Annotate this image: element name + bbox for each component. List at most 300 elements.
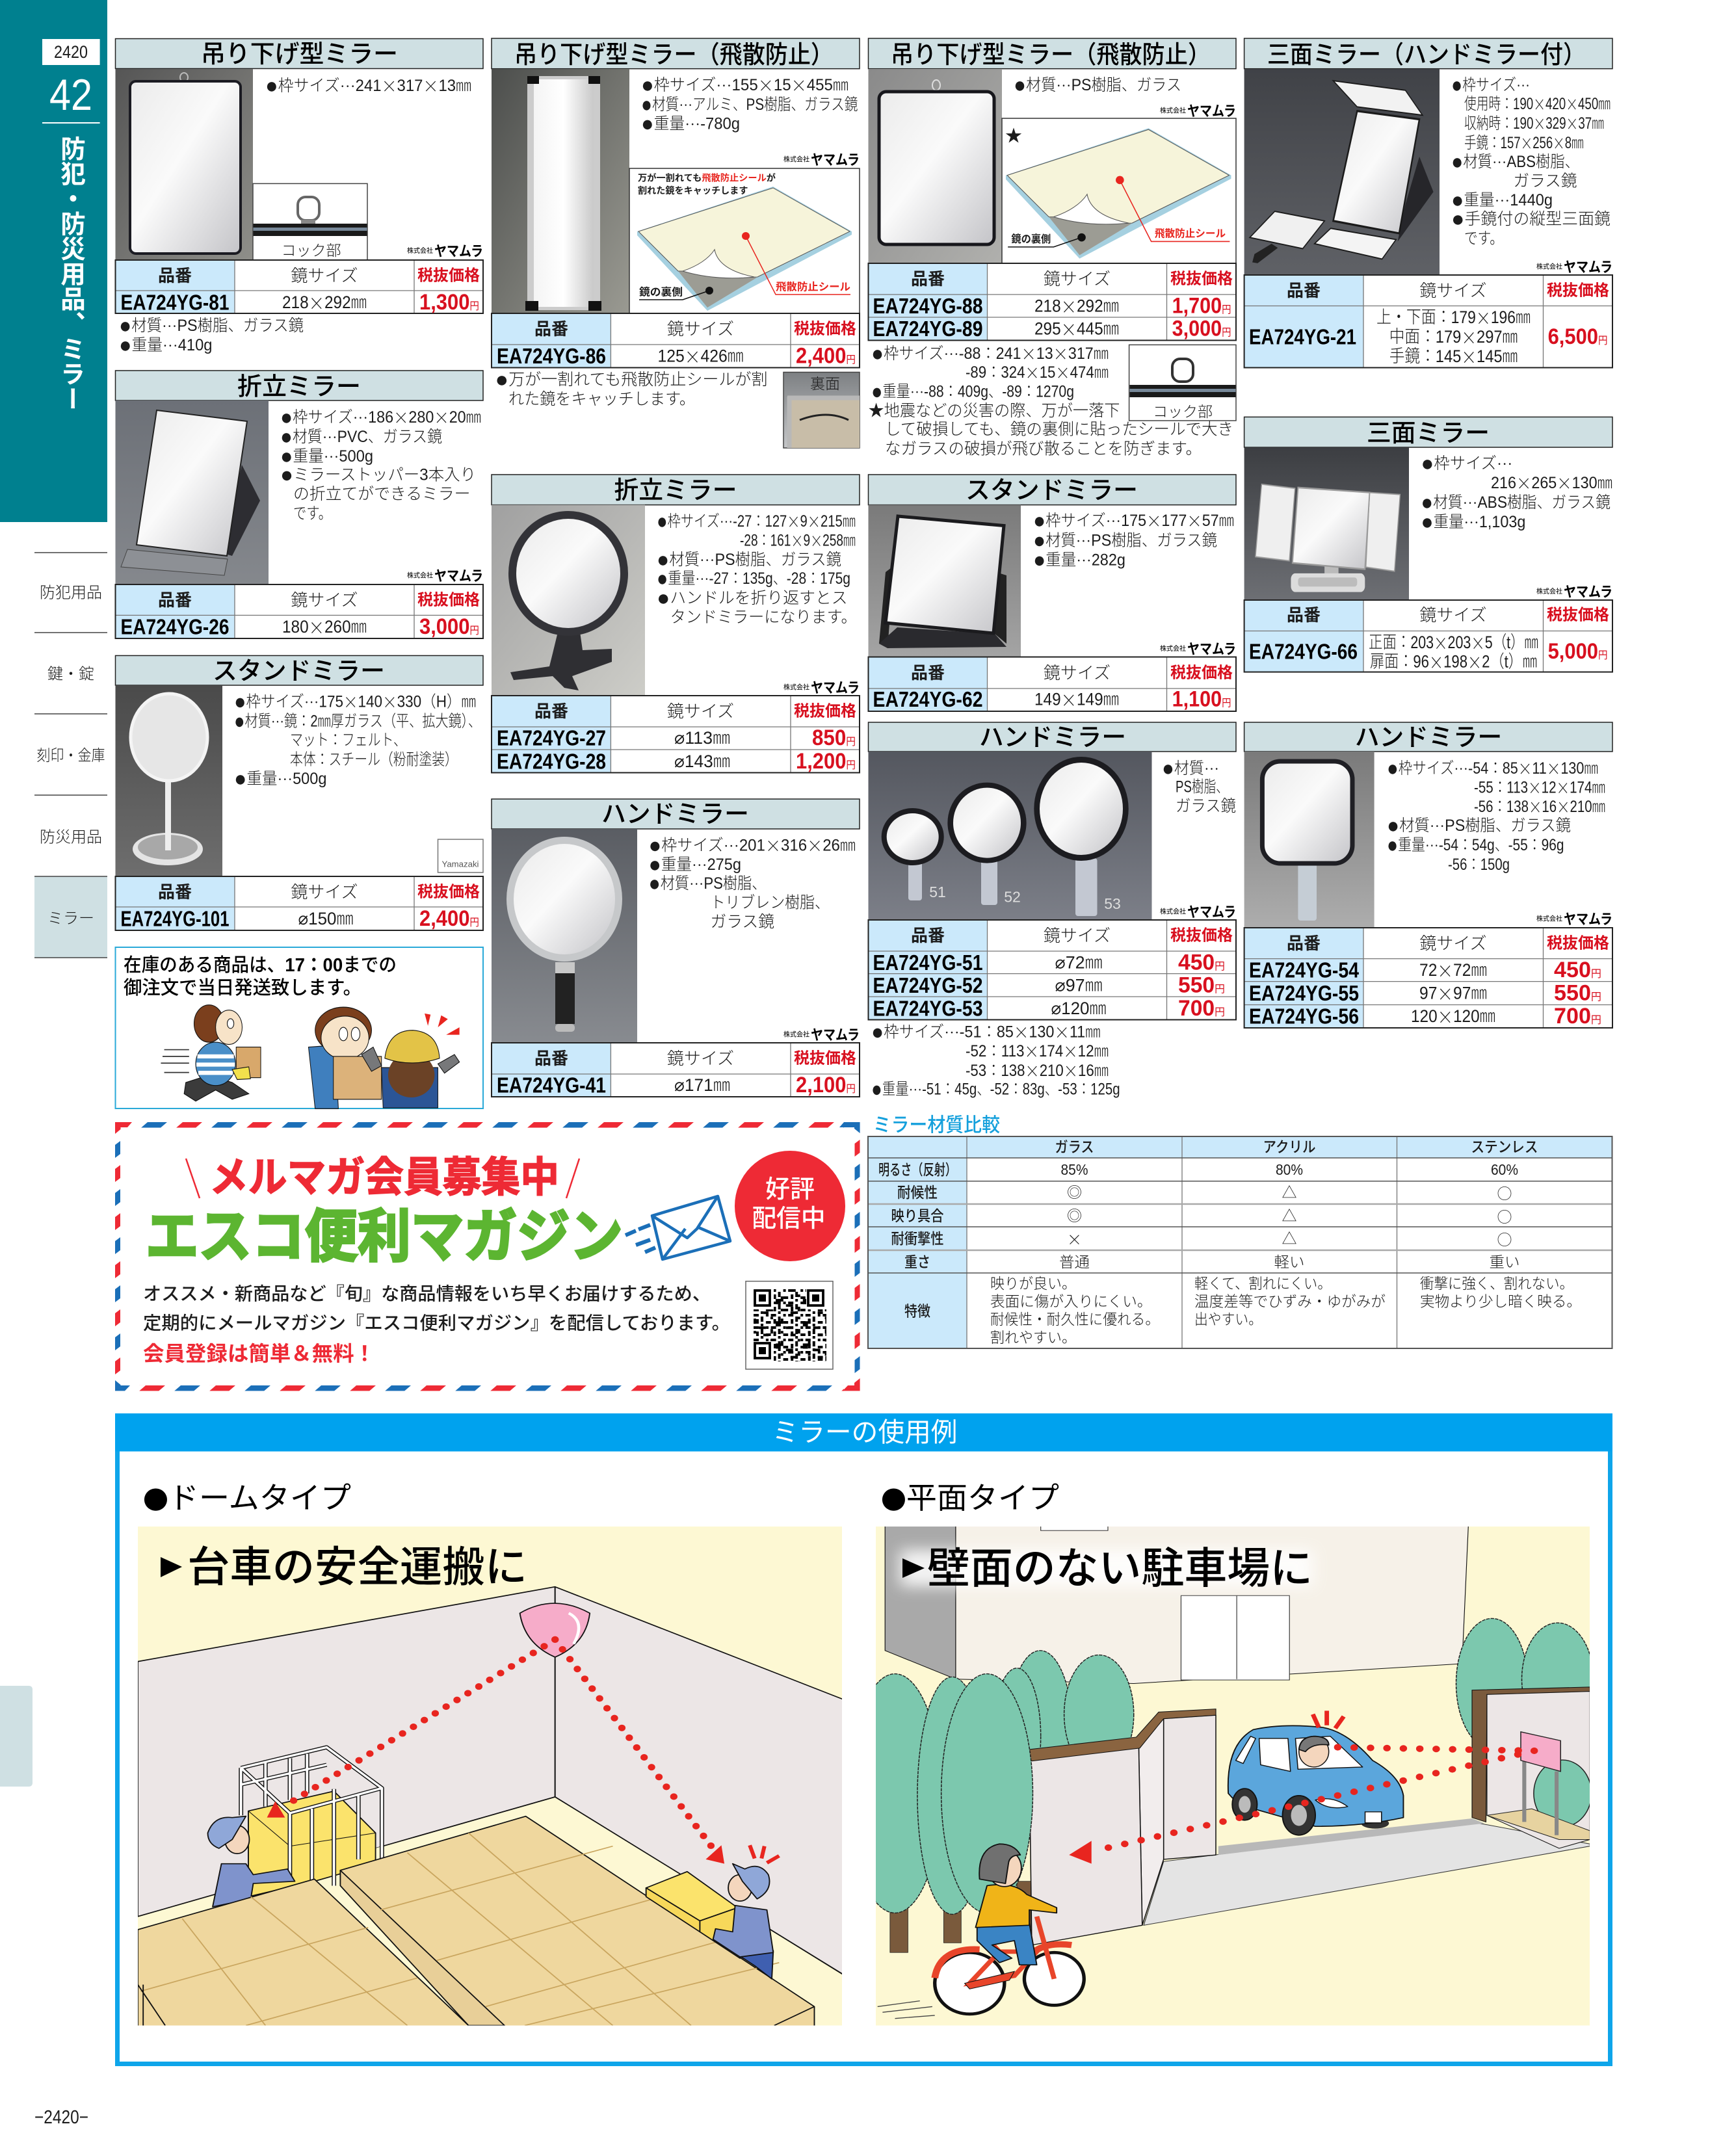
spec text — [1162, 756, 1236, 815]
notes: -89：324×15×474㎜ — [966, 361, 1109, 384]
spec table: 295×445㎜ — [1034, 316, 1119, 341]
spec table: 円 — [1215, 984, 1225, 995]
spec text: ●材質… — [1162, 756, 1219, 781]
spec table: 税抜価格 — [1170, 927, 1233, 944]
notes: ●材質…PS樹脂、ガラス鏡 — [119, 313, 304, 338]
spec table: 税抜価格 — [1547, 282, 1609, 299]
spec text: ●材質…鏡：2㎜厚ガラス（平、拡大鏡）、 — [234, 709, 481, 733]
heading: 三面ミラー（ハンドミラー付） — [1267, 42, 1586, 69]
spec table: 鏡サイズ — [667, 701, 734, 721]
child on bicycle — [935, 1952, 1005, 2014]
panel: 三面ミラー(ハンドミラー付) EA724YG-21 — [1244, 38, 1612, 369]
heading: 三面ミラー — [1367, 420, 1490, 447]
maker logo: Yamazaki — [442, 859, 479, 869]
table: material comparison: 重さ — [904, 1253, 930, 1270]
product photo — [116, 69, 253, 260]
left worker — [213, 1864, 295, 1907]
body text: 定期的にメールマガジン『エスコ便利マガジン』を配信しております。 — [143, 1313, 730, 1333]
table: material comparison: 軽い — [1274, 1253, 1304, 1270]
heading: ハンドミラー — [1355, 724, 1502, 752]
maker logo: ヤマムラ — [1187, 904, 1236, 921]
maker logo — [407, 243, 483, 259]
spec text: ●重量…-54：54g、-55：96g — [1387, 833, 1564, 858]
spec text: トリブレン樹脂、 — [710, 893, 830, 911]
maker logo — [1160, 641, 1236, 657]
inset: cock detail: コック部 — [281, 242, 341, 259]
spec table: ⌀113㎜ — [674, 728, 730, 748]
table: material comparison: ガラス — [1055, 1138, 1094, 1155]
spec text — [280, 405, 481, 523]
spec table: EA724YG-86 — [497, 344, 606, 368]
car — [1361, 1821, 1389, 1829]
product photo — [869, 505, 1021, 657]
illustration: worker with box and helmet — [308, 1007, 460, 1108]
product photo — [492, 69, 629, 313]
spec table: 税抜価格 — [794, 320, 856, 338]
spec table: 税抜価格 — [1170, 664, 1233, 681]
maker logo — [783, 1027, 860, 1043]
table: material comparison: △ — [1282, 1184, 1296, 1201]
left walls — [1164, 1715, 1216, 1859]
spec table: 550 — [1178, 973, 1215, 998]
spec text: ガラス鏡 — [1514, 172, 1577, 190]
spec text: ●枠サイズ…-54：85×11×130㎜ — [1387, 756, 1598, 781]
notes: ●重量…-51：45g、-52：83g、-53：125g — [871, 1077, 1120, 1102]
spec table — [1244, 600, 1612, 674]
maker logo: 株式会社 — [407, 246, 433, 255]
trees front — [890, 1904, 908, 1952]
spec table: ⌀120㎜ — [1051, 999, 1107, 1018]
maker logo: ヤマムラ — [1564, 259, 1612, 276]
illustration: running courier — [161, 1005, 261, 1101]
spec table: EA724YG-101 — [121, 906, 229, 931]
table: material comparison: ◎ — [1067, 1207, 1082, 1224]
right gate — [1472, 1687, 1590, 1822]
spec text: ●材質…ABS樹脂、 — [1451, 150, 1579, 174]
table: material comparison: 軽くて、割れにくい。 — [1194, 1275, 1332, 1292]
notes — [119, 313, 304, 358]
spec table: 品番 — [911, 663, 945, 683]
product photo — [492, 505, 645, 696]
spec text — [1033, 508, 1234, 572]
table: material comparison: 衝撃に強く、割れない。 — [1420, 1275, 1573, 1292]
table: material comparison: ○ — [1497, 1227, 1512, 1250]
spec table: 税抜価格 — [1547, 935, 1609, 952]
spec text: ●枠サイズ…186×280×20㎜ — [280, 405, 481, 430]
maker logo: 株式会社 — [1160, 644, 1186, 653]
table: material comparison: 映り具合 — [891, 1207, 944, 1224]
callout text: 御注文で当日発送致します。 — [124, 977, 362, 999]
magazine name: エスコ便利マガジン — [146, 1204, 623, 1269]
spec table: EA724YG-62 — [873, 687, 983, 711]
spec text: マット：フェルト、 — [290, 731, 406, 750]
heading: スタンドミラー — [213, 658, 385, 685]
spec table: 3,000 — [419, 614, 475, 639]
spec table: 円 — [846, 354, 856, 365]
table: material comparison: 耐衝撃性 — [891, 1230, 944, 1247]
spec table: 税抜価格 — [1170, 270, 1233, 287]
maker logo: ヤマムラ — [811, 152, 860, 168]
illustration caption: 台車の安全運搬に — [187, 1543, 527, 1590]
table: material comparison: ◎ — [1067, 1184, 1082, 1201]
maker logo: 株式会社 — [1536, 263, 1562, 270]
notes: れた鏡をキャッチします。 — [508, 390, 695, 408]
maker logo: 株式会社 — [1160, 908, 1186, 915]
side navigation: 防災用品 — [40, 828, 102, 846]
page number box: 2420 — [54, 42, 88, 62]
spec text: ●重量…1440g — [1451, 188, 1553, 213]
spec text: ●手鏡付の縦型三面鏡 — [1451, 207, 1611, 231]
spec text: ●枠サイズ…201×316×26㎜ — [649, 833, 856, 858]
inset: shatter-proof seal diagram — [629, 168, 860, 313]
spec table: 1,200 — [796, 749, 851, 774]
spec text: ●材質…PS樹脂、ガラス — [1014, 73, 1181, 98]
sidebar: chapter band — [0, 0, 107, 522]
spec table: 72×72㎜ — [1419, 957, 1487, 983]
maker logo — [783, 152, 860, 168]
table: material comparison: ○ — [1497, 1181, 1512, 1203]
spec text: です。 — [1464, 229, 1503, 248]
maker logo — [438, 839, 483, 872]
spec table — [1244, 928, 1612, 1029]
spec text: ガラス鏡 — [710, 913, 774, 931]
spec table: 1,700 — [1172, 294, 1228, 319]
spec table: 中面：179×297㎜ — [1389, 324, 1518, 350]
spec table: 鏡サイズ — [291, 266, 358, 285]
spec text: ●ハンドルを折り返すとス — [657, 586, 848, 610]
table: material comparison: △ — [1282, 1230, 1296, 1247]
heading: スタンドミラー — [966, 477, 1138, 505]
banner: mail magazine — [115, 1122, 860, 1391]
notes — [871, 1020, 1120, 1102]
inset: shatter-proof seal diagram: 万が一割れても飛散防止シールが — [638, 172, 776, 183]
spec table: EA724YG-54 — [1249, 958, 1360, 982]
spec table: 鏡サイズ — [291, 590, 358, 610]
spec text: ●枠サイズ…155×15×455㎜ — [641, 73, 848, 98]
badge: 好評配信中: 配信中 — [752, 1205, 826, 1233]
product photo — [116, 400, 269, 584]
spec table: 上・下面：179×196㎜ — [1376, 304, 1531, 330]
spec table: EA724YG-52 — [873, 973, 983, 997]
spec table — [492, 313, 860, 369]
spec table — [869, 263, 1236, 341]
spec table: 円 — [1222, 304, 1231, 315]
table: material comparison — [868, 1136, 1612, 1348]
table: material comparison: 重い — [1489, 1253, 1520, 1270]
spec text — [657, 509, 857, 627]
product photo: 53 — [1104, 895, 1121, 912]
inset: cock detail — [253, 183, 367, 260]
spec table: 鏡サイズ — [1419, 281, 1487, 300]
spec table: EA724YG-55 — [1249, 981, 1359, 1005]
spec table: 5,000 — [1548, 639, 1603, 664]
spec table: 218×292㎜ — [1034, 293, 1119, 319]
spec table: 円 — [469, 300, 479, 312]
heading: material comparison: ミラー材質比較 — [873, 1114, 1000, 1136]
inset: shatter-proof seal diagram: 割れた鏡をキャッチします — [638, 185, 748, 196]
spec text: -28：161×9×258㎜ — [740, 529, 856, 553]
section heading: ミラーの使用例 — [772, 1417, 957, 1447]
product photo: 51 — [929, 884, 946, 900]
spec table: 品番 — [158, 266, 192, 285]
maker logo — [1536, 259, 1612, 276]
spec table: 125×426㎜ — [658, 343, 744, 369]
product photo — [492, 829, 637, 1043]
spec text: ●重量…275g — [649, 852, 741, 877]
spec table: 1,300 — [419, 290, 475, 315]
spec text: ●重量…1,103g — [1421, 510, 1525, 534]
product photo — [1244, 752, 1374, 928]
spec table: 手鏡：145×145㎜ — [1389, 343, 1518, 369]
spec table: 円 — [846, 736, 856, 748]
spec text: の折立てができるミラー — [293, 485, 471, 503]
spec table: EA724YG-41 — [497, 1073, 606, 1097]
spec table: 円 — [846, 1083, 856, 1095]
spec table: EA724YG-21 — [1249, 325, 1356, 348]
spec table: 円 — [1215, 1006, 1225, 1018]
illustration: flat mirror parking — [849, 1521, 1594, 2026]
spec table: 2,400 — [796, 344, 851, 369]
spec table: 鏡サイズ — [667, 1049, 734, 1068]
heading: 吊り下げ型ミラー — [201, 41, 398, 68]
panel: 吊り下げ型ミラー(飛散防止) EA724YG-86 — [492, 38, 860, 448]
spec text: ●枠サイズ… — [1421, 451, 1512, 476]
spec table: 品番 — [534, 1049, 568, 1068]
spec table: 扉面：96×198×2（t）㎜ — [1370, 649, 1537, 674]
spec table: EA724YG-88 — [873, 294, 983, 318]
spec text: 手鏡：157×256×8㎜ — [1464, 131, 1584, 155]
body text: 会員登録は簡単＆無料！ — [143, 1342, 375, 1365]
panel: usage examples — [115, 1413, 1612, 2064]
spec table: 円 — [1591, 969, 1601, 979]
table: material comparison: 映りが良い。 — [990, 1275, 1076, 1292]
subheading: dome type: ●ドームタイプ — [143, 1480, 351, 1516]
heading: 折立ミラー — [614, 477, 737, 505]
spec table: 850 — [812, 726, 849, 750]
spec table: 鏡サイズ — [1419, 605, 1487, 625]
dome mirror — [520, 1603, 590, 1657]
notes: ★地震などの災害の際、万が一落下 — [869, 402, 1120, 420]
thumb index tab — [0, 1686, 33, 1787]
spec table: 3,000 — [1172, 316, 1228, 341]
product photo — [869, 69, 1002, 263]
heading: 吊り下げ型ミラー（飛散防止） — [514, 42, 834, 69]
heading: 吊り下げ型ミラー（飛散防止） — [891, 42, 1211, 69]
table: material comparison: ○ — [1497, 1205, 1512, 1227]
spec text: ●重量…500g — [280, 444, 373, 469]
maker logo: 株式会社 — [1160, 107, 1186, 114]
spec table: 税抜価格 — [417, 592, 480, 609]
inset: shatter-proof seal diagram — [1002, 118, 1236, 263]
spec table: 円 — [1591, 1014, 1601, 1026]
illustration caption: 壁面のない駐車場に — [927, 1544, 1313, 1592]
spec table: 120×120㎜ — [1411, 1004, 1495, 1029]
side navigation: 防犯用品 — [40, 584, 102, 602]
spec text: ●枠サイズ…-27：127×9×215㎜ — [657, 509, 856, 534]
spec text: ●ミラーストッパー3本入り — [280, 463, 476, 488]
spec text: ●材質…PS樹脂、 — [649, 871, 766, 896]
maker logo: 株式会社 — [783, 683, 809, 692]
maker logo — [1160, 103, 1236, 120]
spec text: ●重量…282g — [1033, 547, 1125, 572]
table: material comparison: 明るさ（反射） — [878, 1161, 956, 1178]
cart boxes — [248, 1791, 376, 1896]
maker logo — [407, 568, 483, 584]
panel: 吊り下げ型ミラー(飛散防止) EA724YG-88/89 — [869, 38, 1236, 458]
spec text — [1387, 756, 1605, 874]
product photo — [1244, 447, 1409, 600]
spec text: ●材質…ABS樹脂、ガラス鏡 — [1421, 490, 1611, 515]
inset: shatter-proof seal diagram: 飛散防止シール — [776, 281, 850, 293]
heading: ハンドミラー — [601, 801, 749, 828]
spec table — [1244, 275, 1612, 369]
spec text: ●材質…PS樹脂、ガラス鏡 — [1033, 528, 1217, 553]
spec table: EA724YG-27 — [497, 726, 606, 750]
badge: 好評配信中 — [735, 1151, 845, 1261]
spec table: 品番 — [534, 701, 568, 721]
spec text: 本体：スチール（粉耐塗装） — [290, 751, 458, 769]
spec table: 700 — [1178, 996, 1215, 1021]
spec table: 鏡サイズ — [1044, 926, 1111, 945]
spec table: 450 — [1554, 958, 1591, 982]
spec table: EA724YG-56 — [1249, 1004, 1359, 1029]
spec table: EA724YG-51 — [873, 950, 983, 975]
spec text — [641, 73, 858, 137]
maker logo: ヤマムラ — [1187, 103, 1236, 120]
spec table: EA724YG-81 — [121, 290, 229, 315]
product photo — [869, 752, 1152, 920]
footer page number: −2420− — [34, 2107, 88, 2128]
notes: ●枠サイズ…-88：241×13×317㎜ — [871, 341, 1109, 366]
spec table: EA724YG-89 — [873, 317, 983, 341]
spec text: ●材質…PS樹脂、ガラス鏡 — [657, 547, 841, 572]
panel: 吊り下げ型ミラー EA724YG-81 — [116, 39, 483, 358]
spec text: ●枠サイズ… — [1451, 73, 1530, 98]
heading: 折立ミラー — [237, 373, 361, 400]
maker logo: 株式会社 — [1536, 914, 1562, 923]
inset: shatter-proof seal diagram: 鏡の裏側 — [639, 286, 683, 298]
chapter number: 42 — [49, 70, 92, 120]
spec table: 700 — [1554, 1004, 1591, 1029]
inset: cock detail: コック部 — [1153, 403, 1213, 420]
spec table: 6,500 — [1548, 324, 1603, 349]
table: material comparison: 60% — [1491, 1161, 1518, 1178]
table: material comparison: 耐候性 — [897, 1184, 938, 1201]
badge: 好評配信中: 好評 — [765, 1176, 815, 1203]
spec table: 鏡サイズ — [1044, 663, 1111, 683]
table: material comparison: 80% — [1276, 1161, 1303, 1178]
spec table — [116, 584, 483, 640]
callout text: 在庫のある商品は、17：00までの — [124, 954, 397, 976]
spec table: 品番 — [1287, 281, 1321, 300]
panel: 三面ミラー EA724YG-66 — [1244, 417, 1612, 674]
table: material comparison: 特徴 — [904, 1303, 930, 1320]
spec table: ⌀150㎜ — [298, 909, 354, 928]
spec table: 450 — [1178, 950, 1215, 975]
spec text — [234, 690, 481, 791]
maker logo: ヤマムラ — [811, 1027, 860, 1043]
spec table: 円 — [469, 917, 479, 928]
chapter title: 防犯・防災用品、ミラー — [57, 136, 86, 411]
spec table: 品番 — [911, 269, 945, 289]
notes: -52：113×174×12㎜ — [966, 1040, 1109, 1063]
table: material comparison: 温度差等でひずみ・ゆがみが — [1194, 1293, 1386, 1310]
spec text: ●重量…500g — [234, 767, 326, 791]
inset: back side photo — [783, 372, 860, 448]
inset: shatter-proof seal diagram: 飛散防止シール — [1155, 228, 1226, 239]
spec table: 円 — [1215, 961, 1225, 972]
table: material comparison: アクリル — [1263, 1138, 1316, 1155]
spec table: 218×292㎜ — [282, 290, 367, 315]
sight lines — [1337, 1747, 1534, 1751]
spec table: 550 — [1554, 980, 1591, 1005]
spec table: 円 — [846, 759, 856, 771]
notes: ●万が一割れても飛散防止シールが割 — [495, 367, 767, 392]
maker logo: 株式会社 — [783, 155, 809, 164]
spec table: 97×97㎜ — [1419, 980, 1487, 1006]
spec table — [869, 920, 1236, 1021]
spec text: PS樹脂、 — [1176, 778, 1228, 796]
spec table: 円 — [469, 625, 479, 636]
table: material comparison: △ — [1282, 1207, 1296, 1224]
floor boxes — [138, 1879, 469, 2031]
spec table: 鏡サイズ — [1419, 934, 1487, 953]
spec table — [116, 260, 483, 315]
table: material comparison: 実物より少し暗く映る。 — [1420, 1293, 1581, 1310]
maker logo — [1536, 584, 1612, 600]
spec table: ⌀72㎜ — [1055, 953, 1103, 973]
spec table: 税抜価格 — [1547, 606, 1609, 624]
panel: スタンドミラー EA724YG-101 — [116, 655, 483, 931]
spec text: ●材質…PS樹脂、ガラス鏡 — [1387, 813, 1571, 838]
maker logo: 株式会社 — [407, 571, 433, 580]
spec table — [869, 657, 1236, 712]
notes: -53：138×210×16㎜ — [966, 1059, 1109, 1082]
recruiting headline: メルマガ会員募集中 — [209, 1154, 559, 1201]
spec table: EA724YG-53 — [873, 996, 983, 1021]
spec table: 品番 — [158, 590, 192, 610]
spec text: -55：113×12×174㎜ — [1474, 776, 1605, 800]
inset: shatter-proof seal diagram: 鏡の裏側 — [1011, 233, 1051, 245]
spec table: 円 — [1591, 991, 1601, 1003]
panel: スタンドミラー EA724YG-62 — [869, 475, 1236, 712]
spec table: 品番 — [911, 926, 945, 945]
spec table: 2,100 — [796, 1073, 851, 1097]
inset: shatter-proof seal diagram: ★ — [1005, 126, 1022, 146]
spec table: 1,100 — [1172, 687, 1228, 712]
side navigation: 刻印・金庫 — [36, 747, 105, 765]
spec table: EA724YG-28 — [497, 749, 606, 774]
maker logo: ヤマムラ — [811, 680, 860, 696]
spec table: 円 — [1598, 650, 1608, 661]
sight lines — [287, 1640, 555, 1804]
inset: back side photo: 裏面 — [810, 375, 840, 392]
maker logo: ヤマムラ — [434, 568, 483, 584]
maker logo: ヤマムラ — [1564, 584, 1612, 600]
spec text: ガラス鏡 — [1176, 797, 1236, 815]
road — [1144, 1822, 1590, 1925]
spec table: 品番 — [1287, 934, 1321, 953]
QR code — [746, 1281, 833, 1369]
spec text — [649, 833, 856, 931]
spec table: 税抜価格 — [417, 267, 480, 285]
spec table: 税抜価格 — [417, 883, 480, 901]
spec table: ⌀143㎜ — [674, 752, 730, 771]
table: material comparison: ステンレス — [1471, 1138, 1538, 1155]
illustration: dome mirror warehouse — [138, 1527, 848, 2031]
spec table: 鏡サイズ — [1044, 269, 1111, 289]
spec table: 品番 — [1287, 605, 1321, 625]
